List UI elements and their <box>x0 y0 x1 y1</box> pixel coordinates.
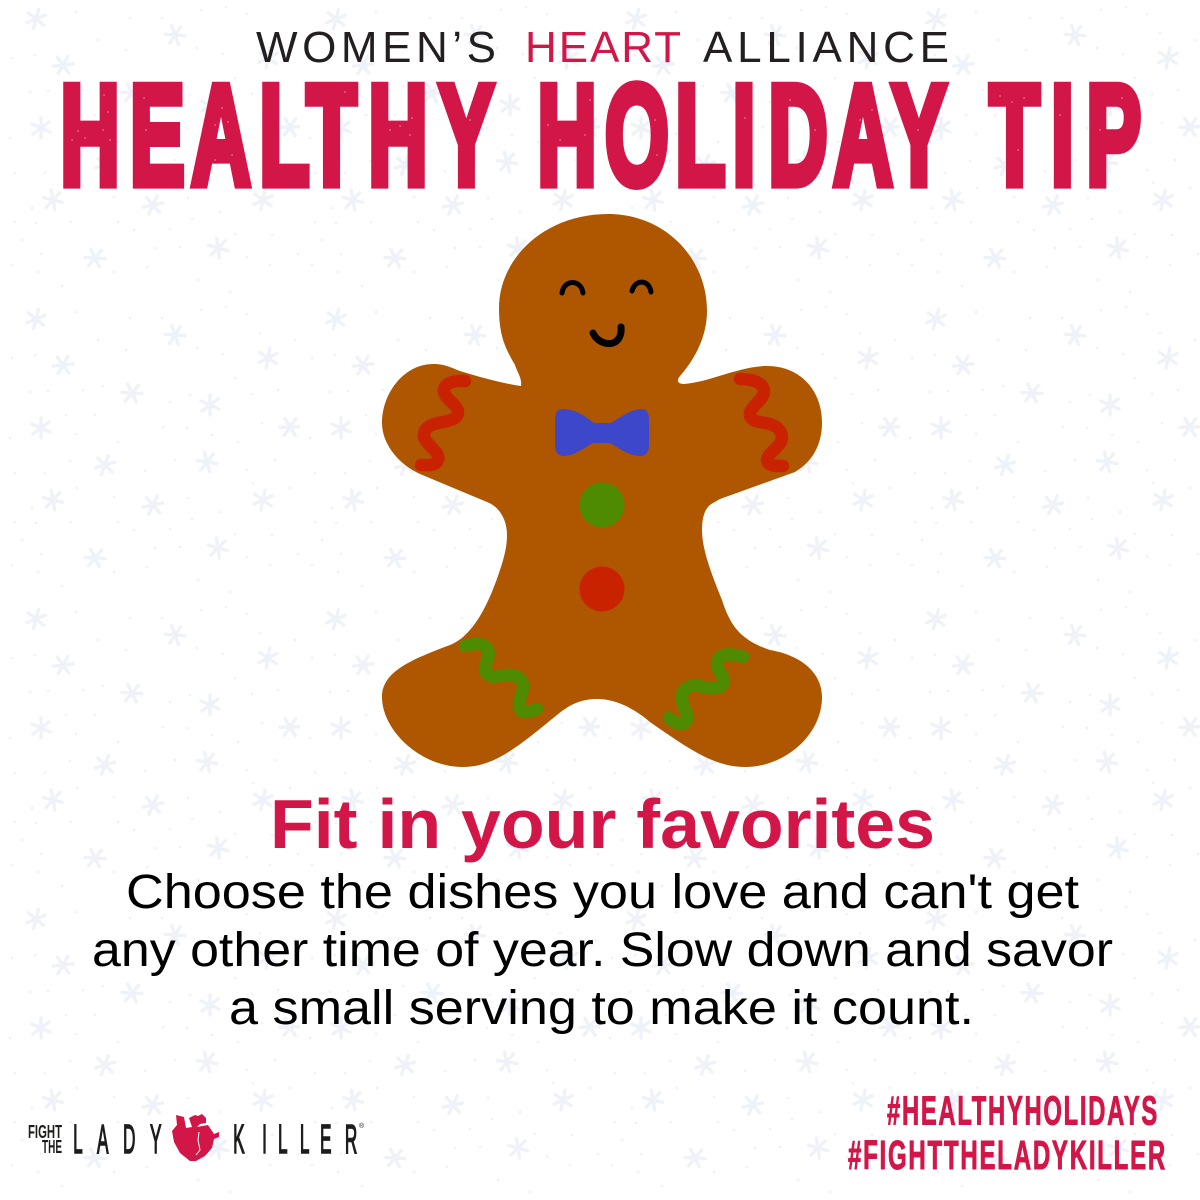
logo wordmark: ® <box>359 1122 365 1130</box>
red button <box>580 566 624 612</box>
logo wordmark: KILLER <box>233 1116 357 1162</box>
cookie body <box>382 214 822 767</box>
green icing on legs <box>465 644 743 724</box>
main title <box>60 55 1141 215</box>
bow tie <box>555 409 649 456</box>
tip body text: a small serving to make it count. <box>229 982 974 1035</box>
hashtags <box>848 1088 1167 1178</box>
logo wordmark: THE <box>42 1137 62 1157</box>
tip body text <box>92 866 1113 1035</box>
face <box>562 282 651 344</box>
organization heading: WOMEN’S <box>256 23 496 72</box>
organization heading: ALLIANCE <box>703 23 949 72</box>
icon: anatomical heart <box>172 1114 219 1161</box>
red icing on arms <box>421 379 783 466</box>
logo: Fight the Lady Killer <box>28 1114 365 1162</box>
main title: HOLIDAY <box>537 55 946 215</box>
logo wordmark <box>28 1116 365 1162</box>
tip body text: Choose the dishes you love and can't get <box>126 866 1079 919</box>
title speckle texture <box>72 92 1122 165</box>
organization heading <box>256 23 949 72</box>
logo wordmark: LADY <box>73 1116 161 1162</box>
organization heading: HEART <box>525 23 681 72</box>
gingerbread man illustration <box>382 214 822 767</box>
tip heading: Fit in your favorites <box>270 785 935 863</box>
main title: HEALTHY <box>60 55 494 215</box>
main title: TIP <box>989 55 1141 215</box>
tip body text: any other time of year. Slow down and savor <box>92 924 1113 977</box>
green button <box>580 482 624 528</box>
logo wordmark: FIGHT <box>28 1122 62 1142</box>
